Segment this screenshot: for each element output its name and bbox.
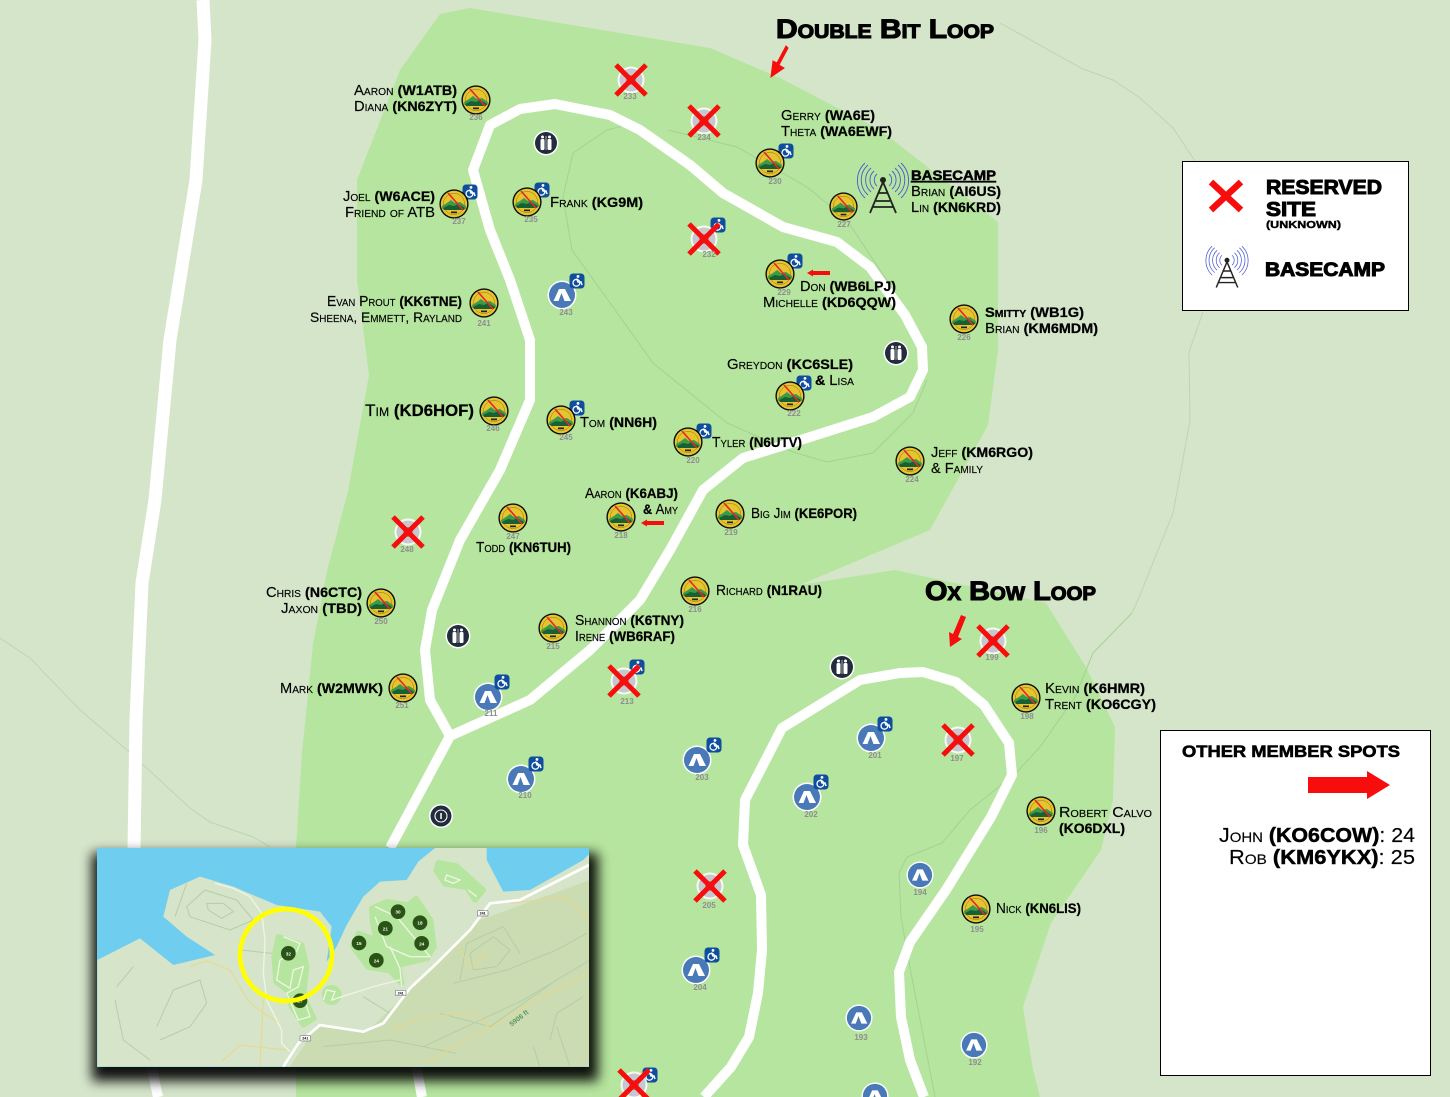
reserved site X markers: 233 (623, 92, 637, 101)
inset locator map: 30 (395, 910, 401, 915)
roads (134, 0, 205, 850)
inset locator map: 241 (398, 991, 404, 995)
member badges: 195 (970, 925, 984, 934)
restroom icons (446, 130, 908, 680)
legend panel (1182, 162, 1408, 310)
member badges: 224 (905, 475, 919, 484)
member labels: Frank (KG9M) (550, 194, 643, 211)
legend panel: SITE (1266, 199, 1316, 221)
arrow: other spots (1308, 771, 1390, 799)
blue tent sites: 192 (968, 1058, 982, 1067)
member badges: 219 (724, 528, 738, 537)
member labels: (KO6DXL) (1059, 820, 1125, 836)
blue tent sites (474, 274, 988, 1097)
member labels: Diana (KN6ZYT) (354, 98, 457, 115)
blue tent sites: 243 (559, 308, 573, 317)
member badges: 220 (686, 456, 700, 465)
member labels: Brian (KM6MDM) (985, 320, 1098, 337)
reserved site X markers: 205 (702, 901, 716, 910)
blue tent sites: 204 (693, 983, 707, 992)
member badges: 196 (1034, 826, 1048, 835)
spot text: John: John (KO6COW) : 24 (1219, 825, 1415, 847)
member labels: Richard (N1RAU) (716, 582, 822, 599)
tower icon: basecamp (857, 163, 909, 213)
reserved site X markers: 248 (400, 545, 414, 554)
reserved site X markers (393, 65, 1008, 1097)
member badges: 235 (524, 215, 538, 224)
parks (274, 863, 483, 1025)
legend text: reserved site: RESERVED (1266, 177, 1382, 199)
inset locator map: 241 (302, 1037, 308, 1041)
member labels: & Lisa (815, 372, 854, 389)
legend text: basecamp: BASECAMP (1265, 260, 1385, 281)
member labels: Friend of ATB (345, 205, 435, 221)
member badges: 251 (395, 701, 409, 710)
member labels: Lin (KN6KRD) (911, 199, 1001, 216)
member labels (266, 82, 1156, 917)
inset locator map (92, 847, 598, 1081)
yellow locator circle (240, 909, 332, 1001)
member labels: Trent (KO6CGY) (1045, 696, 1156, 713)
member labels: Evan Prout (KK6TNE) (327, 293, 462, 310)
reserved site X markers: 232 (702, 250, 716, 259)
reserved site X markers: 197 (950, 754, 964, 763)
section title: Ox Bow Loop: Ox Bow Loop (925, 576, 1096, 606)
member badges: 227 (837, 220, 851, 229)
member labels: & Family (931, 461, 983, 477)
member badges: 226 (957, 333, 971, 342)
member badges: 216 (688, 605, 702, 614)
member labels: Joel (W6ACE) (343, 188, 435, 205)
member labels: Greydon (KC6SLE) (727, 356, 853, 373)
blue tent sites: 194 (913, 888, 927, 897)
member labels: Aaron (K6ABJ) (585, 485, 678, 502)
info icon (429, 804, 453, 828)
member badges: 198 (1020, 712, 1034, 721)
member labels: Jaxon (TBD) (281, 600, 362, 617)
blue tent sites: 203 (695, 773, 709, 782)
member labels: Todd (KN6TUH) (476, 539, 571, 556)
member labels: Sheena, Emmett, Rayland (310, 309, 462, 325)
blue tent sites: 210 (518, 791, 532, 800)
member labels: Tim (KD6HOF) (365, 401, 474, 420)
cluster markers (281, 904, 429, 1008)
member labels: Tom (NN6H) (580, 414, 657, 431)
member labels: BASECAMP (911, 167, 996, 183)
member badges: 215 (546, 642, 560, 651)
legend panel: (UNKNOWN) (1266, 219, 1341, 231)
member badges: 245 (559, 433, 573, 442)
blue tent sites: 211 (485, 709, 498, 718)
member badges: 247 (506, 532, 520, 541)
member labels: Robert Calvo (1059, 805, 1152, 821)
member badges: 222 (787, 409, 801, 418)
member labels: Shannon (K6TNY) (575, 612, 684, 629)
member labels: Aaron (W1ATB) (354, 82, 457, 99)
reserved site X markers: 199 (985, 653, 999, 662)
arrow: Ox Bow Loop pointer (949, 615, 966, 647)
member labels: Smitty (WB1G) (985, 304, 1084, 320)
member badges: 241 (477, 319, 491, 328)
reserved site X markers: 213 (620, 697, 634, 706)
icon: reserved X (1211, 182, 1241, 210)
member labels: Brian (AI6US) (911, 183, 1001, 200)
member labels: Nick (KN6LIS) (996, 900, 1081, 917)
blue tent sites: 201 (868, 751, 882, 760)
member labels: Jeff (KM6RGO) (931, 444, 1033, 461)
inset locator map: 24 (419, 941, 425, 946)
member badges: 236 (469, 113, 483, 122)
member labels: Michelle (KD6QQW) (763, 294, 896, 311)
arrow: Double Bit Loop pointer (771, 46, 788, 77)
shields (300, 911, 488, 1041)
arrow: Don (807, 270, 830, 276)
arrow: Aaron K6ABJ (641, 520, 664, 526)
member labels: Mark (W2MWK) (280, 680, 383, 697)
member badges: 237 (452, 217, 466, 226)
member badges: 250 (374, 617, 388, 626)
member badges (366, 85, 1056, 934)
panel heading: OTHER MEMBER SPOTS (1182, 742, 1400, 761)
icon: basecamp tower (1206, 246, 1248, 288)
inset locator map: 5906 ft (509, 1009, 531, 1028)
inset locator map: 27 (297, 999, 303, 1004)
blue tent sites: 193 (854, 1033, 868, 1042)
member labels: & Amy (643, 501, 678, 518)
member badges: 230 (768, 177, 782, 186)
campground green area (296, 8, 1115, 1097)
member labels: Gerry (WA6E) (781, 107, 875, 124)
member badges: 229 (777, 288, 791, 297)
inset locator map: 21 (383, 926, 388, 931)
inset locator map: 15 (356, 941, 362, 946)
inset locator map: 18 (417, 921, 423, 926)
member badges: 218 (614, 531, 628, 540)
member labels: Irene (WB6RAF) (575, 628, 675, 645)
member labels: Theta (WA6EWF) (781, 123, 892, 140)
member badges: 246 (486, 424, 500, 433)
inset locator map: 32 (286, 951, 291, 956)
other member spots panel (1160, 730, 1430, 1076)
section title: Double Bit Loop: Double Bit Loop (776, 14, 994, 44)
member labels: Tyler (N6UTV) (712, 434, 802, 451)
member labels: Kevin (K6HMR) (1045, 680, 1145, 697)
inset locator map: 241 (480, 912, 486, 916)
inset locator map: 24 (374, 958, 379, 963)
member labels: Big Jim (KE6POR) (751, 505, 857, 522)
member labels: Don (WB6LPJ) (800, 278, 896, 295)
member labels: Chris (N6CTC) (266, 584, 362, 601)
spot text: Rob: Rob (KM6YKX) : 25 (1229, 847, 1415, 869)
reserved site X markers: 234 (697, 133, 711, 142)
highway (283, 865, 589, 1067)
blue tent sites: 202 (804, 810, 818, 819)
